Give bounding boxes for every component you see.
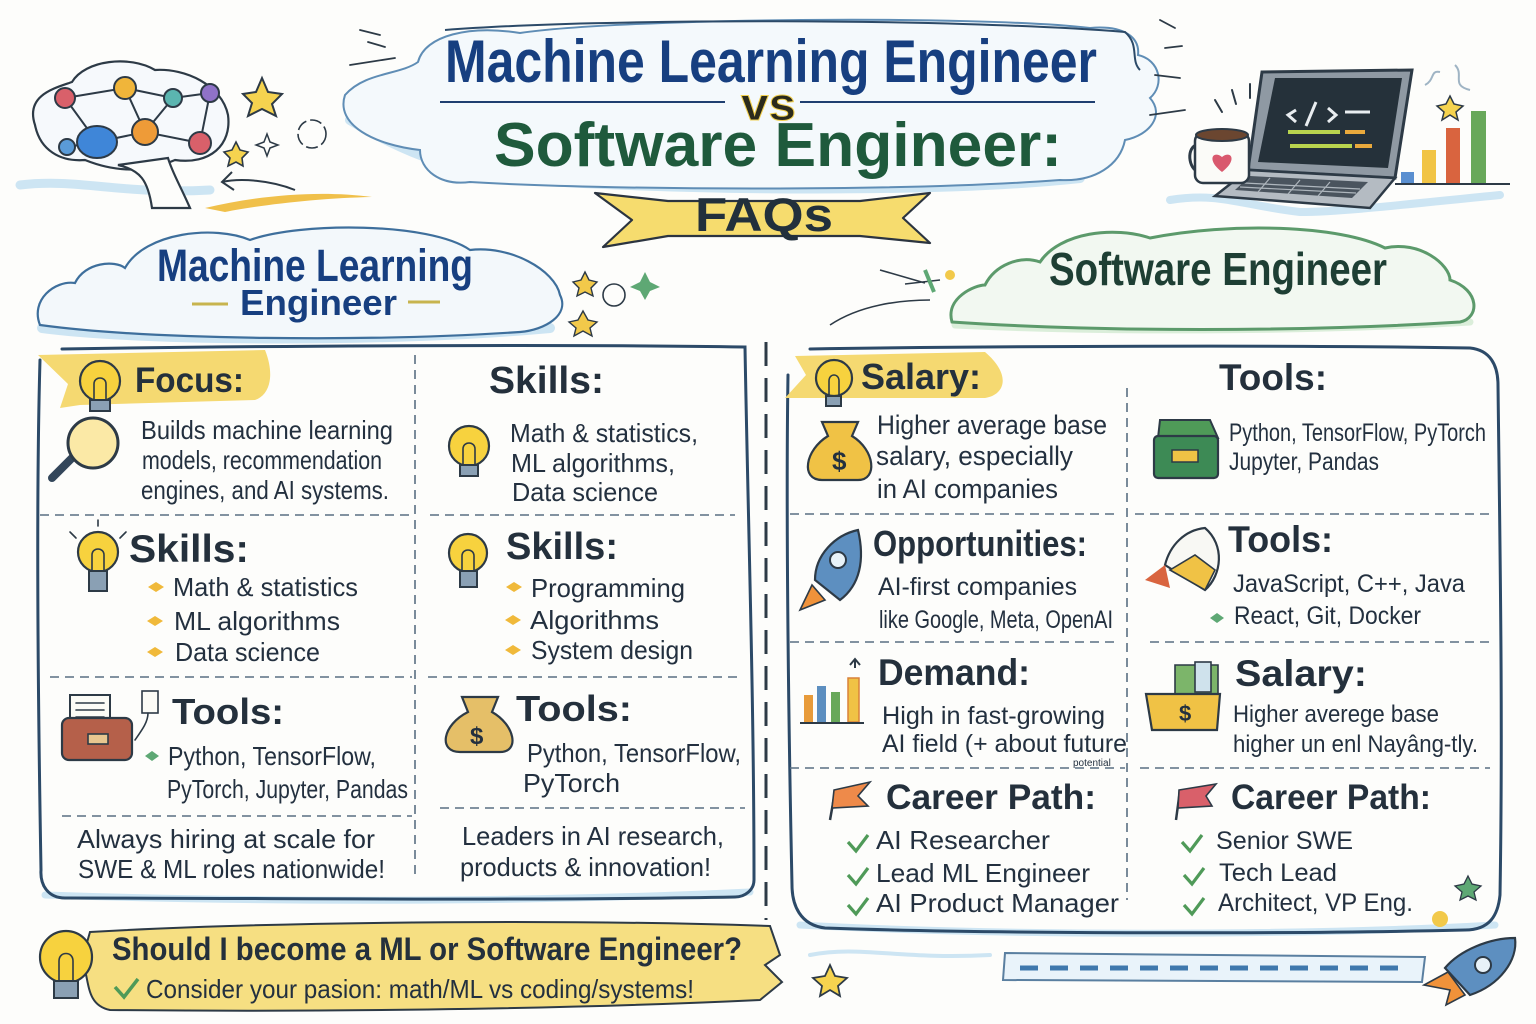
career heading: Career Path: [886,778,1096,817]
icon: bulb [449,426,489,476]
cloud: Machine Learning Engineer [38,228,562,338]
title line 2: Software Engineer: [494,111,1062,180]
panel: software engineer [785,346,1501,933]
salary text: Higher averege base [1233,701,1439,728]
icon: rocket [800,530,861,610]
salary heading: Salary: [1235,653,1367,694]
demand text [882,702,1127,769]
decorative sparkles centre [569,270,955,336]
focus text: Builds machine learning [141,415,393,445]
career heading: Career Path: [1231,778,1431,817]
decorative footer with rocket [810,938,1515,1005]
tools text [1210,570,1465,630]
tools text [523,738,741,798]
icon: magnifier [52,418,118,478]
FAQs ribbon [595,188,930,247]
icon: money bag: $ [832,446,847,476]
question: Should I become a ML or Software Engineer? [112,931,742,967]
cloud heading: Software Engineer [1049,243,1387,295]
tools text: PyTorch, Jupyter, Pandas [167,774,408,804]
career list [848,825,1119,918]
skills list: Data science [175,637,320,667]
tools text [1229,419,1486,476]
note right: products & innovation! [460,852,711,882]
note right: Leaders in AI research, [462,821,724,851]
skills list: ML algorithms [174,606,340,636]
cloud heading line 2: Engineer [240,282,397,323]
tools text: JavaScript, C++, Java [1233,570,1465,598]
icon: rocket [1145,528,1219,590]
tools heading: Tools: [1219,357,1327,398]
salary text [1233,701,1478,758]
icon: bulb [449,534,487,587]
skills list [147,572,358,667]
skills list: Programming [531,573,685,603]
focus text: models, recommendation [142,445,382,475]
icon: laptop with code, mug and bar chart [1170,65,1510,212]
icon: money bag [446,697,512,752]
heading: Salary: [861,356,981,397]
focus text: engines, and AI systems. [141,475,389,505]
tools heading: Tools: [516,688,632,729]
skills text [510,418,698,507]
cloud: Software Engineer [951,228,1474,330]
title line 1: Machine Learning Engineer [445,28,1097,95]
career list: AI Product Manager [876,888,1119,918]
salary text: salary, especially [876,441,1073,471]
icon: bulb [40,931,92,998]
skills list: Algorithms [530,605,659,635]
check [115,979,138,997]
icon: flag [1176,784,1216,820]
skills list: System design [531,635,693,665]
skills heading: Skills: [489,360,604,402]
skills heading: Skills: [506,526,618,568]
career list [1182,827,1413,917]
opportunities text [878,573,1113,634]
tools text [145,741,408,804]
icon: money bag: $ [470,723,484,750]
skills text: Data science [512,477,658,507]
cloud heading line 1: Machine Learning [157,240,473,291]
note left [77,824,385,884]
tools text: PyTorch [523,768,620,798]
demand text: potential [1073,758,1111,769]
icon: basket with cash: $ [1179,701,1191,726]
demand text: High in fast-growing [882,702,1105,730]
skills text: Math & statistics, [510,418,698,448]
salary text: in AI companies [877,474,1058,504]
career list: AI Researcher [876,825,1050,855]
focus ribbon [38,350,270,411]
centre divider [764,342,768,920]
callout: should I become [40,922,782,1011]
note left: Always hiring at scale for [77,824,375,854]
tools text: Python, TensorFlow, [527,738,741,768]
icon: flag [830,782,870,820]
demand text: AI field (+ about future [882,730,1127,758]
icon: bulb [816,360,852,406]
tools text: React, Git, Docker [1234,602,1421,630]
icon: brain network [20,61,372,212]
tools text: Jupyter, Pandas [1229,448,1379,476]
icon: bulb [70,520,126,591]
icon: green toolbox [1154,420,1218,478]
skills list [505,573,693,665]
panel: machine learning engineer [38,346,754,900]
icon: bar chart [800,659,864,723]
tools heading: Tools: [1228,519,1333,560]
salary text: Higher average base [877,410,1107,440]
title banner [343,20,1185,188]
skills heading: Skills: [129,528,249,571]
note left: SWE & ML roles nationwide! [78,854,385,884]
opportunities text: like Google, Meta, OpenAI [879,606,1113,634]
title vs: vs [741,78,796,130]
focus text [141,415,393,505]
icon: toolbox [62,691,158,760]
skills list: Math & statistics [173,572,358,602]
tools text: Python, TensorFlow, [168,741,376,771]
heading: Focus: [135,361,244,400]
salary text: higher un enl Nayâng-tly. [1233,731,1478,758]
salary text [876,410,1107,504]
skills text: ML algorithms, [511,448,675,478]
opportunities heading: Opportunities: [873,523,1087,564]
tools heading: Tools: [172,691,284,732]
career list: Tech Lead [1219,859,1337,887]
note right [460,821,724,882]
FAQs ribbon: FAQs [695,188,833,241]
career list: Lead ML Engineer [876,858,1090,888]
career list: Senior SWE [1216,827,1353,855]
career list: Architect, VP Eng. [1218,889,1413,917]
opportunities text: AI-first companies [878,573,1077,601]
icon: money bag [808,422,871,480]
icon: bulb [80,361,120,411]
demand heading: Demand: [878,652,1030,693]
icon: basket with cash [1146,662,1220,730]
salary ribbon [785,352,1003,406]
answer: Consider your pasion: math/ML vs coding/systems! [146,974,694,1004]
